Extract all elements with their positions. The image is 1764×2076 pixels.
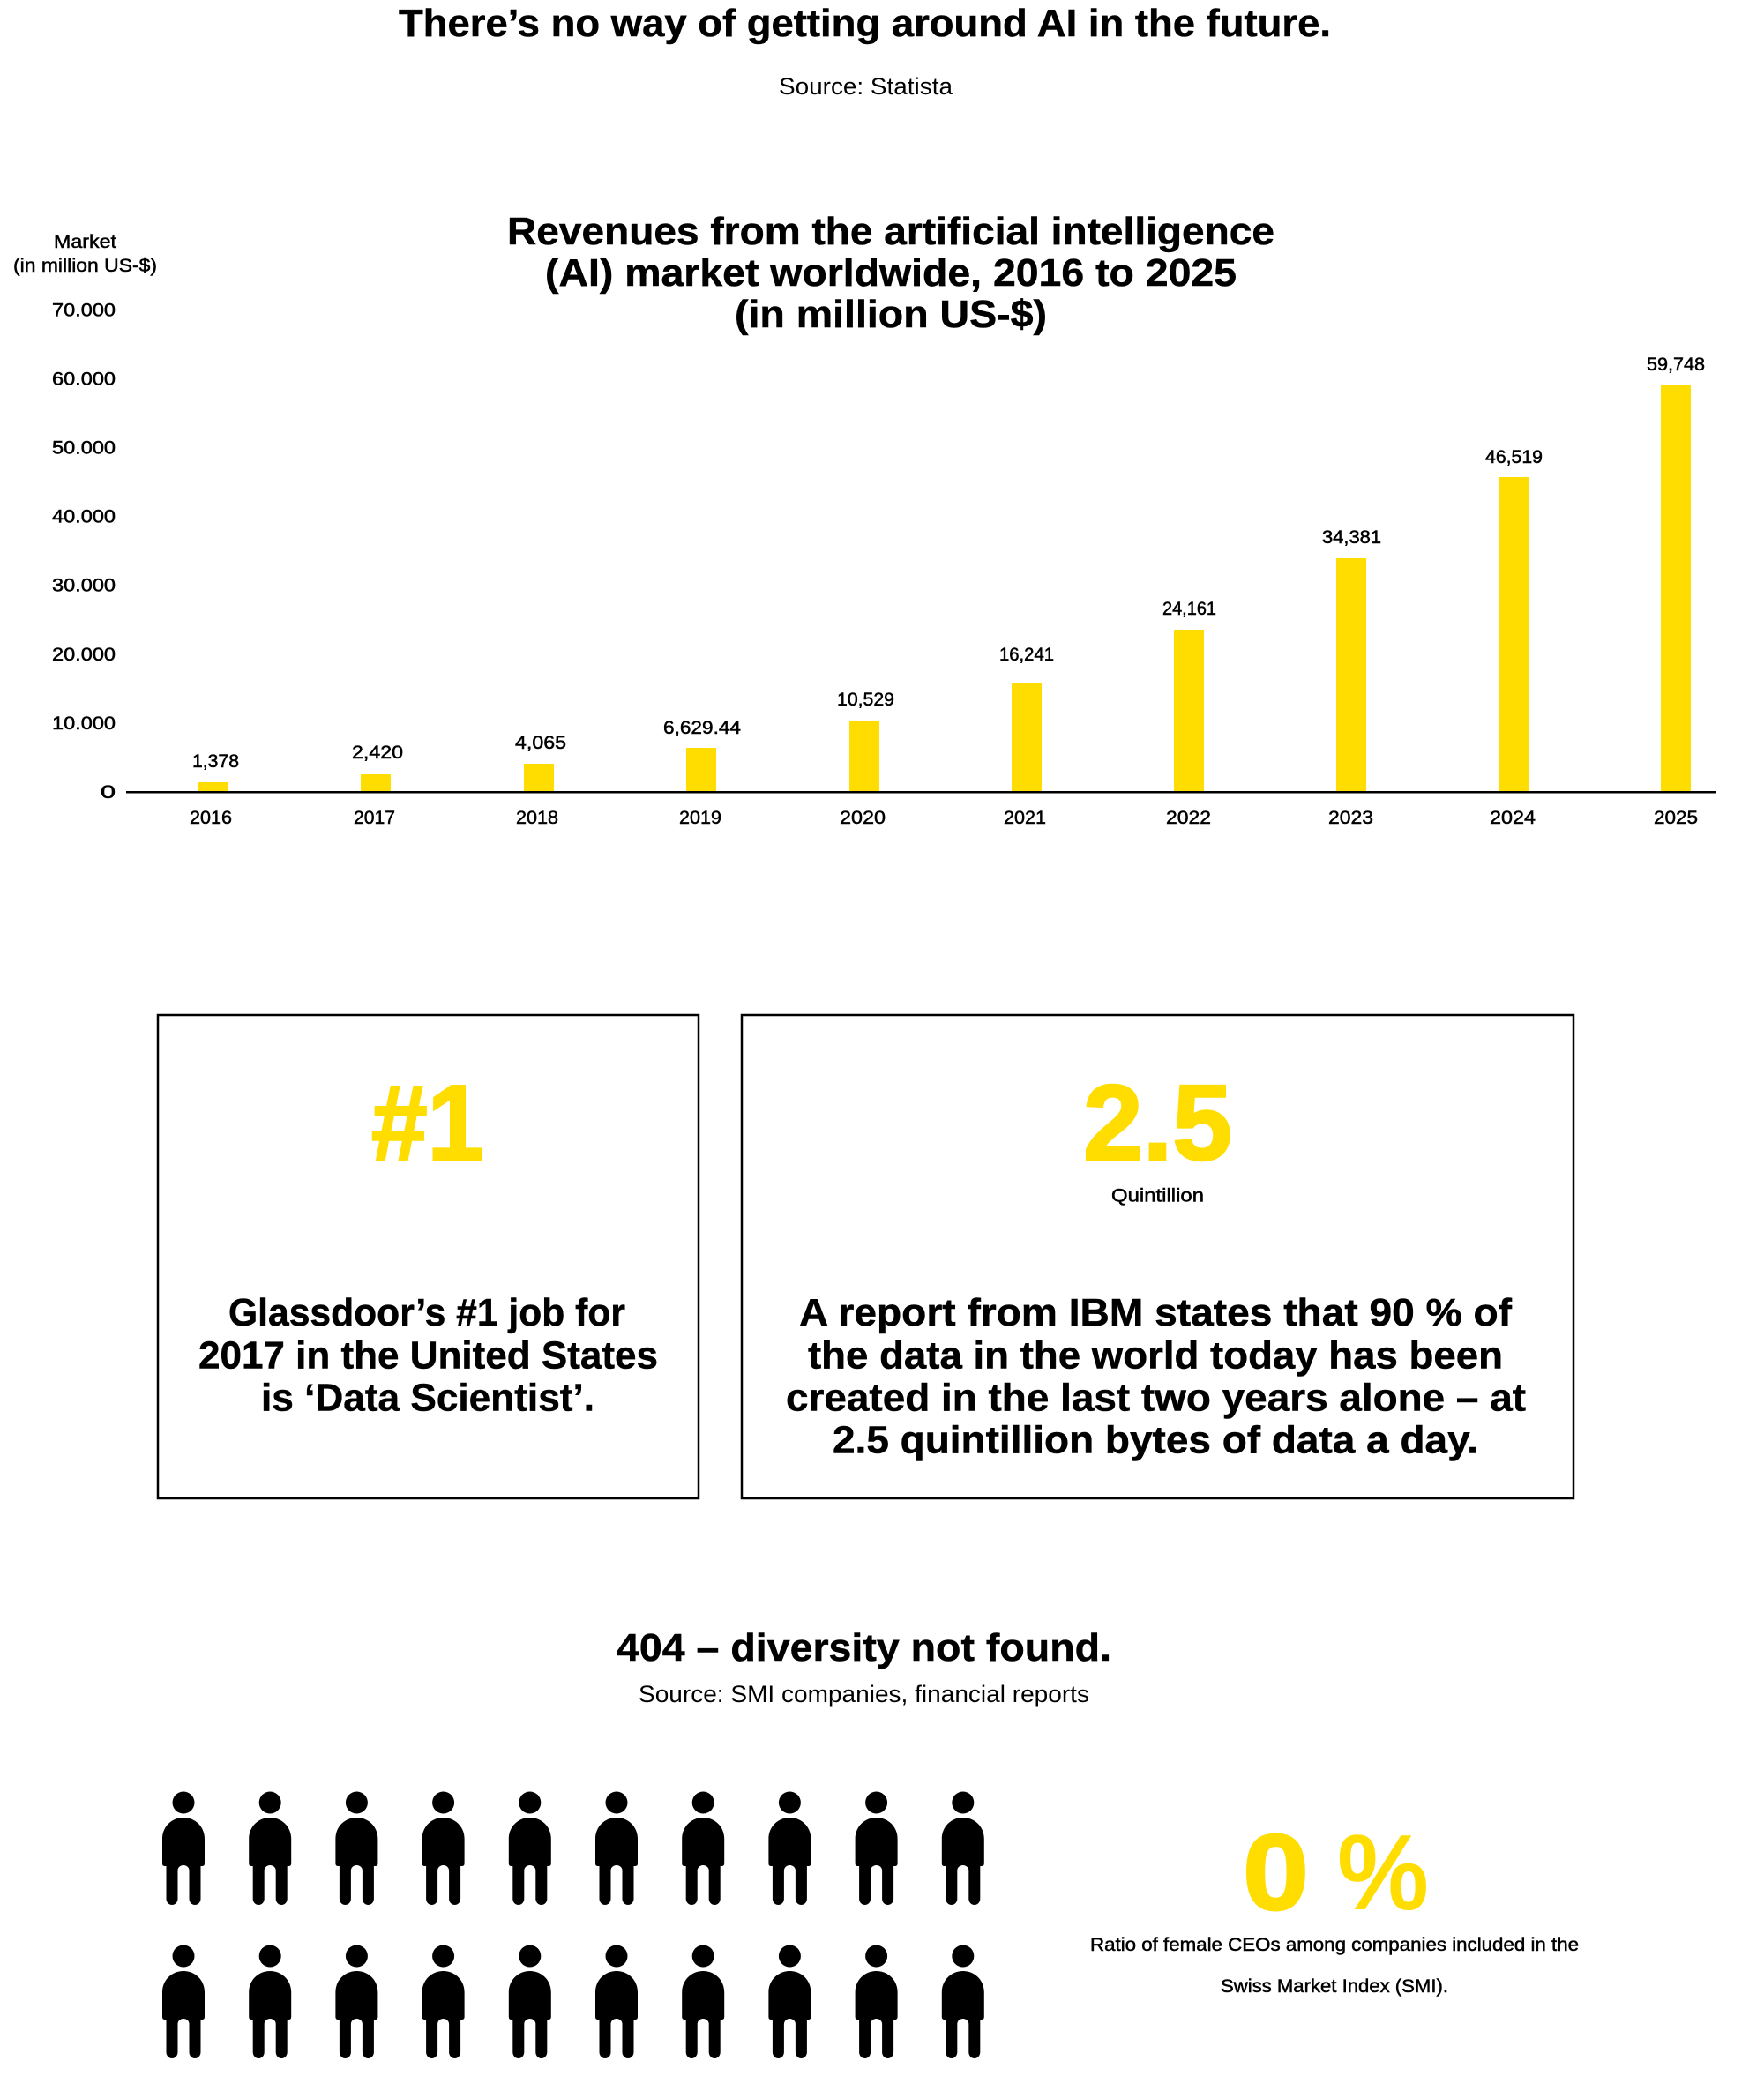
year labels: 2023: [1328, 808, 1373, 828]
year labels: 2025: [1654, 808, 1698, 828]
stat: 0 %: 0: [1243, 1812, 1309, 1932]
value labels: 6,629.44: [663, 718, 741, 738]
x axis line: [126, 791, 1716, 794]
y axis title: Market: [54, 232, 116, 252]
y axis title: (in million US-$): [13, 256, 157, 276]
y axis labels: 70.000: [52, 300, 116, 321]
chart title: [507, 210, 1274, 336]
panel text: [786, 1291, 1526, 1462]
panel text: the data in the world today has been: [808, 1333, 1503, 1378]
source: Statista: Source: Statista: [779, 73, 953, 100]
panel text: created in the last two years alone – at: [786, 1376, 1526, 1420]
year labels: 2016: [190, 808, 232, 828]
value labels: 2,420: [352, 743, 403, 763]
year labels: 2024: [1490, 808, 1536, 828]
value labels: 4,065: [515, 733, 566, 753]
year labels: [190, 808, 1698, 828]
panel text: 2.5 quintillion bytes of data a day.: [833, 1418, 1478, 1462]
heading: diversity not found: 404 – diversity not found.: [617, 1626, 1111, 1669]
y axis labels: 20.000: [52, 645, 116, 665]
panel: 2.5 quintillion bytes: [742, 1015, 1573, 1498]
panel text: [198, 1291, 658, 1420]
unit: Quintillion: Quintillion: [1111, 1185, 1204, 1206]
panel border: [158, 1015, 699, 1498]
stat caption: Ratio of female CEOs among companies included in the: [1090, 1935, 1579, 1955]
big number: #1: #1: [371, 1063, 483, 1183]
stat: 0 %: %: [1337, 1812, 1429, 1932]
year labels: 2021: [1004, 808, 1046, 828]
y axis labels: 60.000: [52, 369, 116, 390]
chart title: (in million US-$): [735, 293, 1047, 336]
chart title: (AI) market worldwide, 2016 to 2025: [545, 251, 1237, 295]
year labels: 2020: [840, 808, 886, 828]
y axis title: [13, 232, 157, 276]
y axis labels: 0: [101, 782, 116, 803]
big number: 2.5: 2.5: [1083, 1063, 1232, 1183]
value labels: 10,529: [837, 690, 894, 710]
bars: [198, 385, 1691, 792]
pictogram: 20 male CEOs: [162, 1792, 984, 2058]
year labels: 2019: [679, 808, 721, 828]
value labels: 24,161: [1162, 599, 1216, 619]
year labels: 2017: [354, 808, 395, 828]
value labels: 46,519: [1485, 447, 1543, 467]
panel border: [742, 1015, 1573, 1498]
y axis labels: 30.000: [52, 575, 116, 596]
source: SMI: Source: SMI companies, financial reports: [639, 1681, 1089, 1707]
y axis labels: [52, 300, 116, 803]
value labels: [192, 355, 1705, 772]
panel: Glassdoor #1 job: [158, 1015, 699, 1498]
panel text: Glassdoor’s #1 job for: [228, 1291, 625, 1334]
title: future of AI: There’s no way of getting around AI in the future.: [399, 2, 1331, 45]
y axis labels: 40.000: [52, 506, 116, 527]
value labels: 59,748: [1647, 355, 1705, 375]
y axis labels: 10.000: [52, 713, 116, 734]
panel text: A report from IBM states that 90 % of: [799, 1291, 1512, 1334]
stat caption: [1090, 1935, 1579, 1997]
panel text: 2017 in the United States: [198, 1333, 658, 1378]
stat caption: Swiss Market Index (SMI).: [1221, 1976, 1448, 1997]
y axis labels: 50.000: [52, 437, 116, 459]
panel text: is ‘Data Scientist’.: [261, 1376, 594, 1420]
bar chart: AI market revenues: [13, 210, 1716, 828]
value labels: 16,241: [999, 645, 1054, 665]
stat: 0 %: [1243, 1812, 1429, 1932]
value labels: 34,381: [1322, 527, 1381, 548]
year labels: 2018: [516, 808, 558, 828]
value labels: 1,378: [192, 751, 239, 772]
chart title: Revenues from the artificial intelligence: [507, 210, 1274, 253]
year labels: 2022: [1166, 808, 1211, 828]
